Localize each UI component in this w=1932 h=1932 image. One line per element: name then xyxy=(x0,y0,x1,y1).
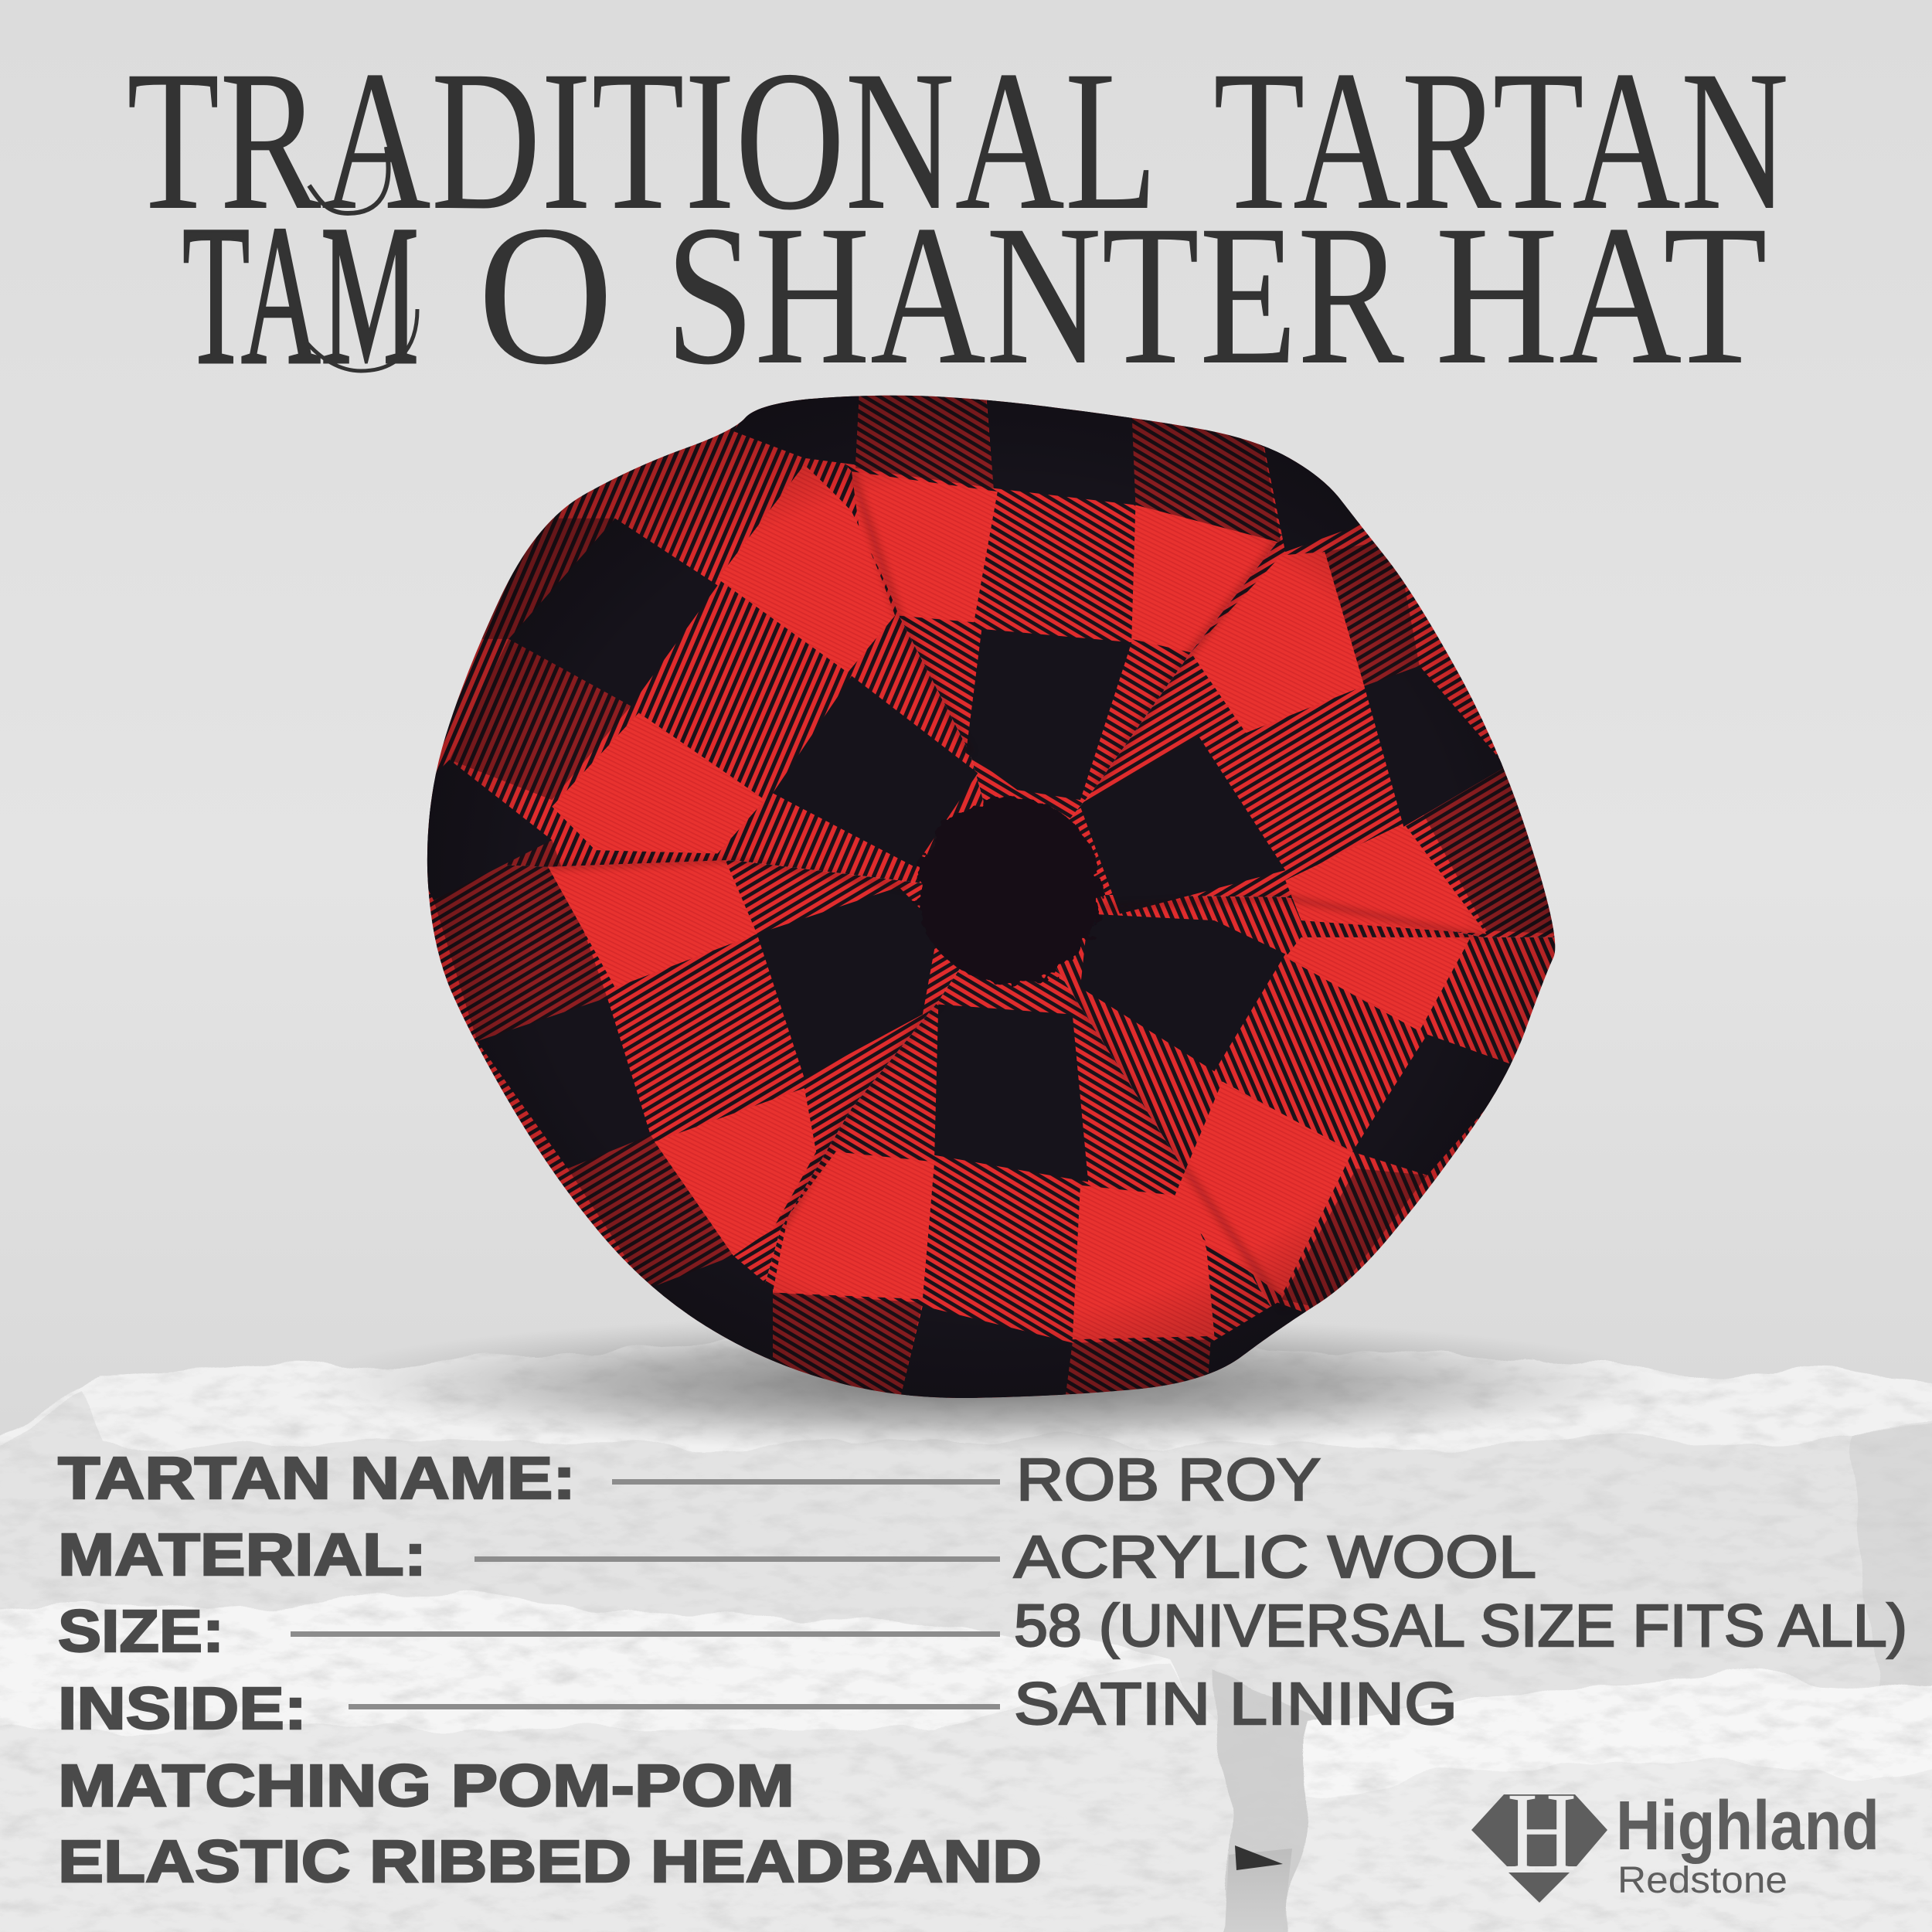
spec: inside: SATIN LINING xyxy=(1014,1671,1458,1737)
icon: diamond monogram xyxy=(1471,1769,1607,1903)
spec: tartan name: TARTAN NAME: xyxy=(58,1445,576,1512)
spec: material: ACRYLIC WOOL xyxy=(1014,1524,1536,1590)
red squares xyxy=(548,464,1486,1339)
rock pedestal xyxy=(0,1341,1932,1932)
rim shading xyxy=(418,384,1570,1410)
spec: size: 58 (UNIVERSAL SIZE FITS ALL) xyxy=(1014,1593,1907,1659)
hat: red and black tartan tam xyxy=(427,396,1555,1398)
logo: Highland Redstone: Highland xyxy=(1616,1787,1879,1865)
spec: size: SIZE: xyxy=(58,1598,224,1665)
dark rim bands xyxy=(434,391,1561,1403)
title: O xyxy=(478,184,614,406)
floor and dark gap between rocks xyxy=(1225,1845,1292,1932)
pom-pom xyxy=(918,797,1100,985)
title: HAT xyxy=(1435,184,1767,406)
spec: material: MATERIAL: xyxy=(58,1522,427,1588)
logo: Highland Redstone: Redstone xyxy=(1617,1860,1787,1901)
title: SHANTER xyxy=(665,184,1405,406)
spec: tartan name: ROB ROY xyxy=(1016,1447,1321,1513)
spec: material xyxy=(58,1522,1536,1590)
spec: inside xyxy=(58,1671,1458,1742)
title xyxy=(127,29,1789,406)
black squares xyxy=(410,388,1522,1403)
title: TRADITIONAL xyxy=(127,29,1158,252)
spec: inside: INSIDE: xyxy=(58,1675,307,1742)
feature: elastic ribbed headband: ELASTIC RIBBED HEADBAND xyxy=(58,1828,1042,1895)
fabric panels with twill stripes xyxy=(427,396,1555,1398)
title: TAM xyxy=(182,184,419,406)
icon: diamond monogram: H xyxy=(1507,1769,1577,1895)
feature: matching pom-pom: MATCHING POM-POM xyxy=(58,1753,794,1819)
spec: tartan name xyxy=(58,1445,1321,1513)
panel seam shading xyxy=(548,471,1482,1309)
spec: size xyxy=(58,1593,1907,1665)
logo: Highland Redstone xyxy=(1471,1769,1879,1903)
hat shadow on rock xyxy=(305,1314,1665,1453)
